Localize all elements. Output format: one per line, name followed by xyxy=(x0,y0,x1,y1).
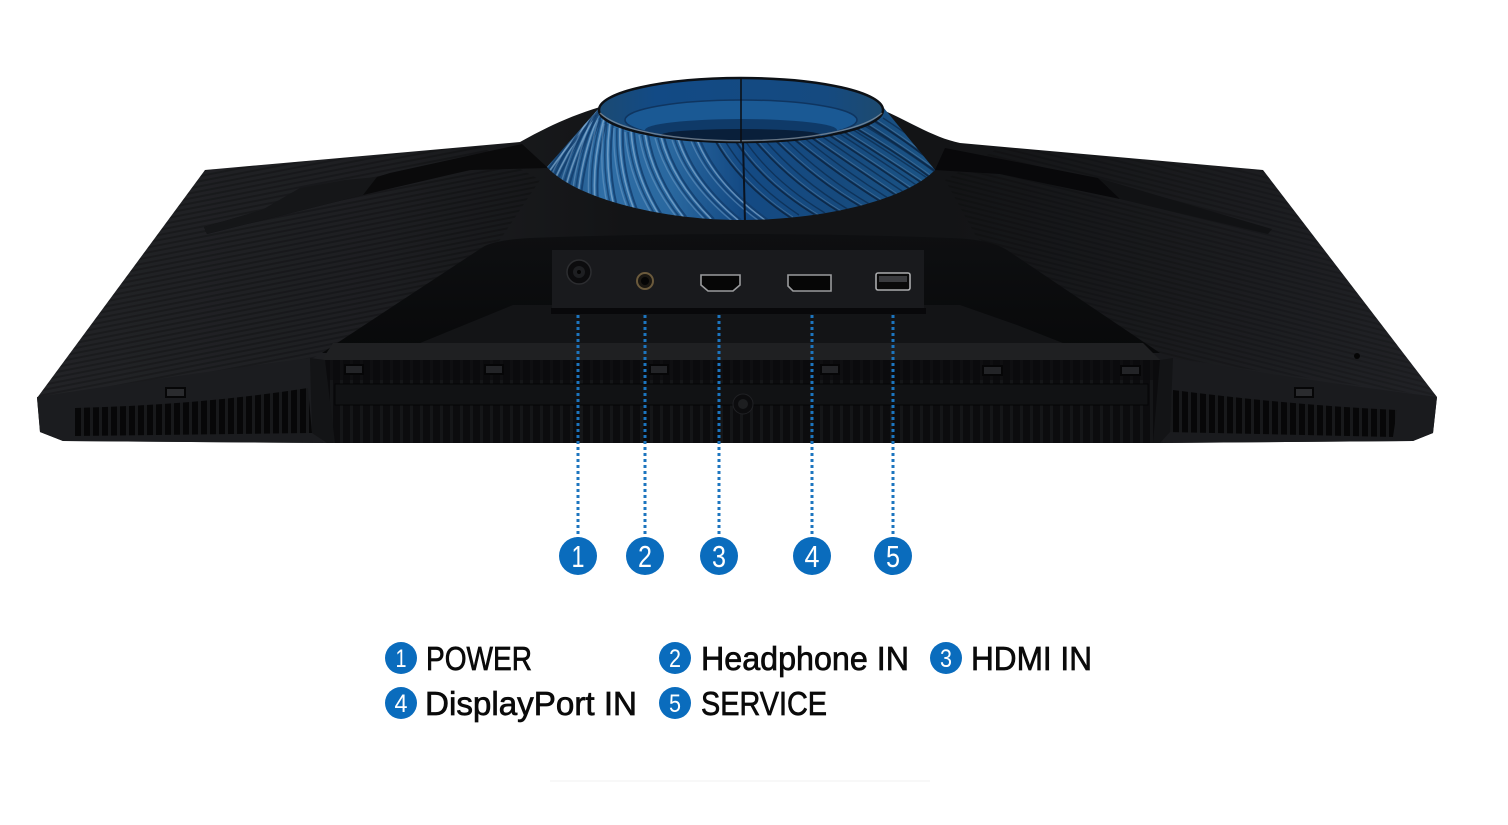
marker 1: 1 xyxy=(572,539,584,574)
marker 3: 3 xyxy=(712,539,726,574)
legend: SERVICE xyxy=(659,685,827,722)
USB service port xyxy=(876,273,910,290)
center pillars xyxy=(310,358,1173,443)
legend: Headphone IN: Headphone IN xyxy=(701,640,909,677)
legend: HDMI IN: HDMI IN xyxy=(971,640,1092,677)
numbered markers xyxy=(559,537,912,575)
clip tabs xyxy=(345,365,1140,375)
legend: DisplayPort IN: DisplayPort IN xyxy=(425,685,637,722)
ribbed cone xyxy=(547,108,935,220)
right wing slot xyxy=(935,148,1272,234)
rear control button xyxy=(1354,353,1360,359)
rear recess xyxy=(322,234,1160,353)
monitor rear view xyxy=(37,107,1437,443)
marker 2: 2 xyxy=(638,539,652,574)
marker 2 xyxy=(626,537,664,575)
power port xyxy=(567,260,591,284)
marker 5 xyxy=(874,537,912,575)
legend: POWER: 1 xyxy=(396,645,406,673)
legend: Headphone IN: 2 xyxy=(669,645,681,673)
marker 4: 4 xyxy=(804,539,820,574)
DisplayPort port xyxy=(788,275,831,291)
stand ring xyxy=(542,78,943,222)
bottom bar top face xyxy=(322,343,1160,360)
legend: HDMI IN: 3 xyxy=(940,645,952,673)
legend: POWER xyxy=(385,640,532,677)
dotted callout lines xyxy=(578,315,893,538)
monitor body xyxy=(37,107,1437,443)
left end face xyxy=(37,358,327,443)
left vent xyxy=(75,388,312,436)
ring opening xyxy=(599,78,883,142)
legend xyxy=(385,640,1092,722)
front grille xyxy=(325,360,1160,443)
legend: SERVICE: SERVICE xyxy=(701,685,827,722)
marker 3 xyxy=(700,537,738,575)
marker 4 xyxy=(793,537,831,575)
HDMI port xyxy=(701,275,740,291)
right end face xyxy=(1160,358,1437,443)
side tabs xyxy=(166,388,1313,397)
legend: POWER: POWER xyxy=(426,640,532,677)
left wing slot xyxy=(204,144,548,234)
legend: DisplayPort IN: 4 xyxy=(394,690,408,718)
marker 5: 5 xyxy=(886,539,900,574)
marker 1 xyxy=(559,537,597,575)
port panel xyxy=(551,250,926,314)
headphone port xyxy=(637,273,653,289)
right vent xyxy=(1167,390,1397,437)
legend: SERVICE: 5 xyxy=(669,690,681,718)
